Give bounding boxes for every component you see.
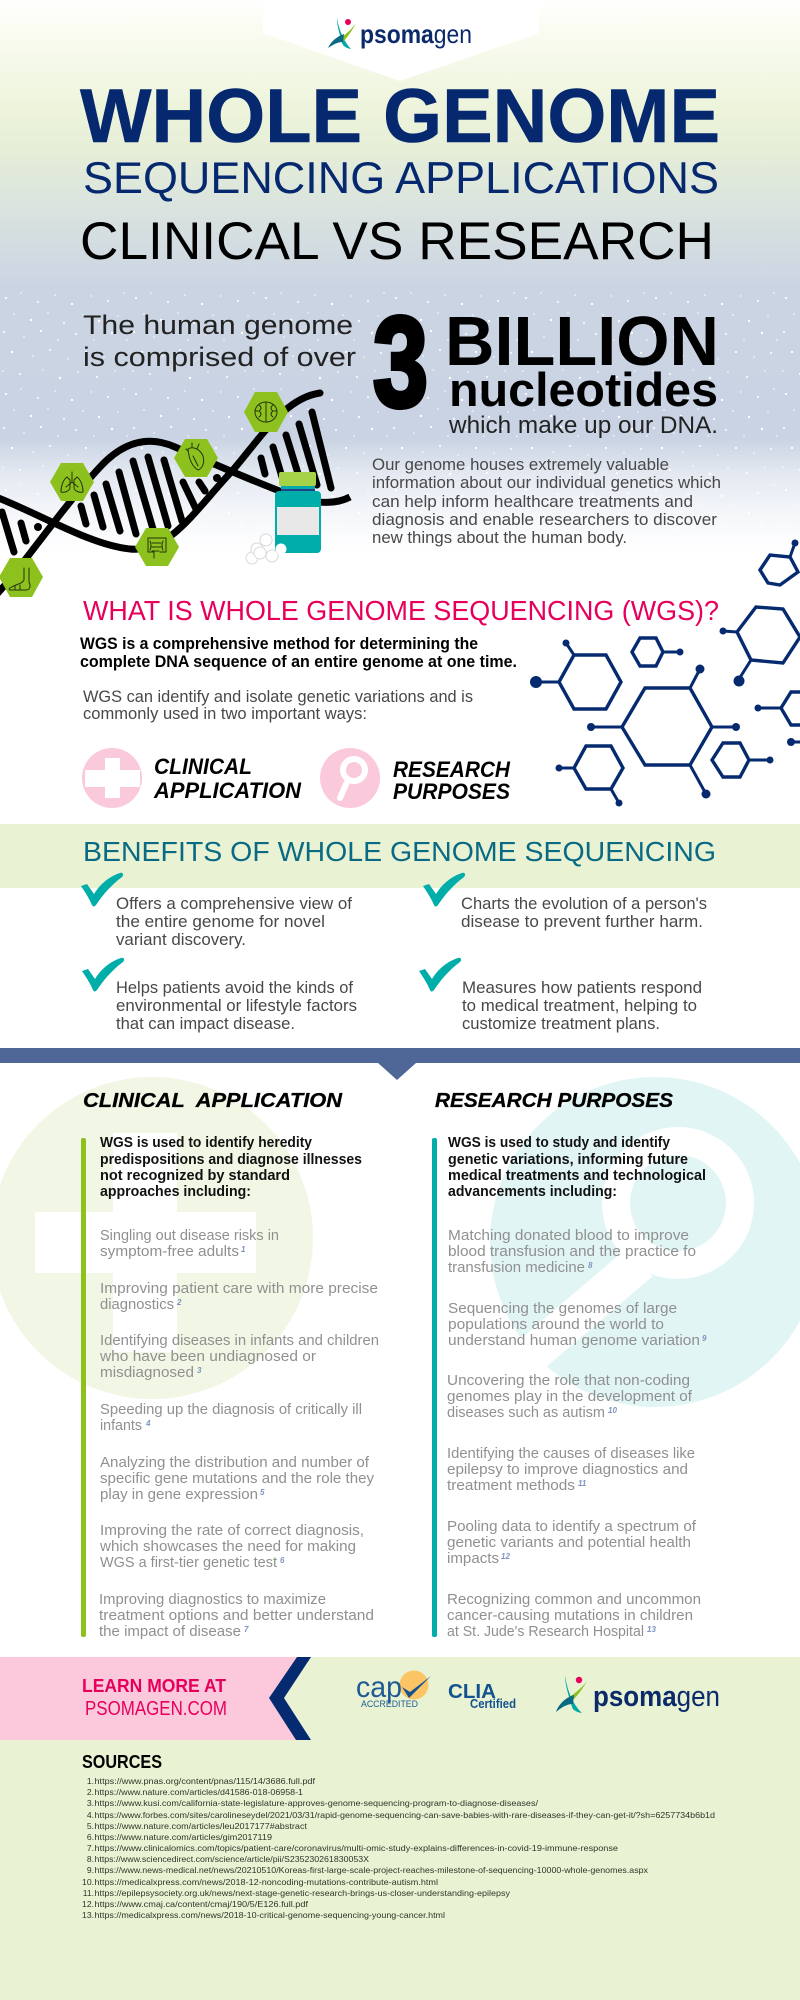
item 12: Pooling data to identify a spectrum of [447, 1519, 697, 1535]
benefit 4: to medical treatment, helping to [462, 996, 697, 1015]
divider band with arrow [0, 1048, 800, 1080]
icon: pink magnifier circle [320, 748, 380, 808]
watermark: plus circle [0, 1077, 313, 1399]
benefit 2 [423, 873, 707, 931]
intro [100, 1135, 362, 1200]
genome description paragraph [372, 455, 721, 547]
icon: pills [246, 534, 286, 564]
item 12 [447, 1519, 697, 1567]
source list: 10. [82, 1877, 94, 1887]
CAP accredited logo: cap [356, 1671, 402, 1704]
genome description paragraph: Our genome houses extremely valuable [372, 455, 669, 474]
WGS uses intro: commonly used in two important ways: [83, 704, 367, 723]
item 10: genomes play in the development of [447, 1389, 693, 1405]
statistic: 3 billion nucleotides [83, 291, 719, 439]
benefit 3: that can impact disease. [116, 1014, 295, 1033]
item 8 [448, 1228, 696, 1276]
item 1: Singling out disease risks in [100, 1228, 279, 1244]
item 6: WGS a first-tier genetic test [100, 1555, 277, 1571]
item 1: symptom-free adults [100, 1244, 239, 1260]
WGS definition: complete DNA sequence of an entire genome at one time. [80, 653, 517, 671]
footer background [0, 1657, 800, 2000]
intro: medical treatments and technological [448, 1168, 706, 1184]
intro: WGS is used to identify heredity [100, 1135, 312, 1151]
item 8: blood transfusion and the practice fo [448, 1244, 696, 1260]
star field [0, 290, 800, 540]
psomagen logo footer [556, 1675, 720, 1713]
source list: https://www.pnas.org/content/pnas/115/14/3686.full.pdf [94, 1776, 316, 1786]
label: APPLICATION [153, 778, 302, 803]
item 7: 7 [244, 1625, 249, 1634]
item 11: Identifying the causes of diseases like [447, 1446, 695, 1462]
benefit 2: disease to prevent further harm. [461, 912, 703, 931]
molecule network illustration [530, 540, 800, 806]
watermark: magnifier circle [490, 1077, 800, 1407]
benefit 3: environmental or lifestyle factors [116, 996, 357, 1015]
source list: https://www.kusi.com/california-state-legislature-approves-genome-sequencing-program-to-diagnose-diseases/ [94, 1798, 539, 1808]
item 13: 13 [647, 1625, 656, 1634]
item 5: 5 [260, 1488, 265, 1497]
source list: https://medicalxpress.com/news/2018-10-critical-genome-sequencing-young-cancer.html [94, 1910, 445, 1920]
item 10: 10 [608, 1406, 617, 1415]
item 13 [447, 1592, 701, 1640]
item 5: Analyzing the distribution and number of [100, 1455, 370, 1471]
psomagen wordmark: psomagen [360, 19, 472, 49]
icon: lungs hexagon [50, 463, 94, 501]
title [80, 74, 720, 271]
item 6: which showcases the need for making [99, 1539, 356, 1555]
DNA strands [0, 393, 350, 595]
accent bar [81, 1138, 86, 1637]
benefit 3: Helps patients avoid the kinds of [116, 978, 353, 997]
benefit 1: Offers a comprehensive view of [116, 894, 352, 913]
source list: 3. [87, 1798, 94, 1808]
big number: 3 [373, 291, 428, 434]
icon: pink plus circle [82, 748, 142, 808]
navy chevron [269, 1657, 311, 1740]
benefit 2: Charts the evolution of a person's [461, 894, 707, 913]
benefit 4: customize treatment plans. [462, 1014, 660, 1033]
source list: https://epilepsysociety.org.uk/news/next-stage-genetic-research-brings-us-closer-understanding-epilepsy [94, 1888, 511, 1898]
item 9: understand human genome variation [448, 1333, 700, 1349]
source list: https://www.nature.com/articles/gim2017119 [94, 1832, 272, 1842]
item 12: impacts [447, 1551, 499, 1567]
source list: 8. [87, 1854, 94, 1864]
genome description paragraph: diagnosis and enable researchers to discover [372, 510, 717, 529]
source list: 13. [82, 1910, 94, 1920]
item 5: specific gene mutations and the role they [100, 1471, 375, 1487]
item 13: cancer-causing mutations in children [447, 1608, 693, 1624]
intro: not recognized by standard [100, 1168, 290, 1184]
item 4: Speeding up the diagnosis of critically ill [100, 1402, 362, 1418]
item 8: transfusion medicine [448, 1260, 585, 1276]
item 3: 3 [197, 1366, 202, 1375]
title line 3: CLINICAL VS RESEARCH [80, 212, 714, 271]
CLIA certified logo [448, 1681, 516, 1711]
benefit 1: variant discovery. [116, 930, 246, 949]
genome description paragraph: can help inform healthcare treatments and [372, 492, 693, 511]
website: PSOMAGEN.COM [85, 1698, 227, 1720]
intro: advancements including: [448, 1184, 617, 1200]
icon: heart hexagon [174, 439, 218, 477]
psomagen logo icon [328, 18, 356, 49]
source list: https://www.news-medical.net/news/20210510/Koreas-first-large-scale-project-reaches-milestone-of-sequencing-10000-whole-genomes.aspx [94, 1865, 649, 1875]
item 12: 12 [501, 1552, 510, 1561]
CLIA certified logo: CLIA [448, 1681, 496, 1703]
icon: medicine bottle [275, 472, 321, 553]
clinical application badge [82, 748, 302, 808]
intro: approaches including: [100, 1184, 251, 1200]
statistic: 3 billion nucleotides: is comprised of over [83, 342, 356, 372]
item 12: genetic variants and potential health [447, 1535, 691, 1551]
heading: sources: SOURCES [82, 1752, 162, 1772]
source list [82, 1776, 715, 1920]
item 9: 9 [702, 1334, 707, 1343]
panel: research purposes [432, 1090, 707, 1640]
benefit 1 [81, 873, 352, 949]
label: PURPOSES [393, 779, 510, 804]
label: CLINICAL [154, 754, 252, 779]
item 7: treatment options and better understand [99, 1608, 374, 1624]
which make up our DNA: which make up our DNA. [448, 412, 718, 439]
icon: intestine hexagon [135, 528, 179, 566]
intro: predispositions and diagnose illnesses [100, 1152, 362, 1168]
source list: 7. [87, 1843, 94, 1853]
item 2 [100, 1281, 378, 1313]
benefits band [0, 824, 800, 888]
icon: foot hexagon [0, 558, 43, 597]
item 3: Identifying diseases in infants and children [100, 1333, 379, 1349]
source list: 9. [87, 1865, 94, 1875]
source list: https://www.nature.com/articles/d41586-018-06958-1 [94, 1787, 303, 1797]
WGS definition: WGS is a comprehensive method for determining the [80, 635, 478, 653]
source list: 12. [82, 1899, 94, 1909]
item 8: Matching donated blood to improve [448, 1228, 689, 1244]
intro: WGS is used to study and identify [448, 1135, 670, 1151]
icon: brain hexagon [244, 392, 288, 432]
item 6 [99, 1523, 364, 1571]
nucleotides: nucleotides [449, 363, 718, 416]
logo badge [263, 0, 539, 81]
item 5: play in gene expression [100, 1487, 258, 1503]
intro: genetic variations, informing future [448, 1152, 688, 1168]
CLIA certified logo: Certified [470, 1697, 516, 1711]
item 2: diagnostics [100, 1297, 174, 1313]
benefit 1: the entire genome for novel [116, 912, 325, 931]
DNA rungs [2, 412, 331, 552]
WGS definition [80, 635, 517, 671]
item 11 [447, 1446, 695, 1494]
item 11: treatment methods [447, 1478, 575, 1494]
item 4 [100, 1402, 362, 1434]
item 7: the impact of disease [99, 1624, 241, 1640]
panel: clinical application [81, 1090, 379, 1640]
title line 1: WHOLE GENOME [80, 74, 720, 159]
source list: 2. [87, 1787, 94, 1797]
heading: RESEARCH PURPOSES [435, 1090, 674, 1112]
learn more text: LEARN MORE AT [82, 1676, 226, 1696]
item 5 [100, 1455, 375, 1503]
logo icon [556, 1675, 587, 1713]
item 2: 2 [176, 1298, 182, 1307]
benefit 3 [82, 958, 357, 1033]
item 4: infants [100, 1418, 142, 1434]
benefit 4: Measures how patients respond [462, 978, 702, 997]
genome description paragraph: new things about the human body. [372, 528, 627, 547]
item 11: epilepsy to improve diagnostics and [447, 1462, 688, 1478]
intro [448, 1135, 706, 1200]
item 9 [448, 1301, 707, 1349]
heading: CLINICAL APPLICATION [83, 1090, 343, 1112]
WGS uses intro: WGS can identify and isolate genetic variations and is [83, 687, 473, 706]
item 11: 11 [578, 1479, 587, 1488]
source list: 11. [83, 1888, 94, 1898]
item 9: populations around the world to [448, 1317, 664, 1333]
source list: 5. [87, 1821, 94, 1831]
call to action banner [0, 1657, 311, 1740]
source list: https://medicalxpress.com/news/2018-12-noncoding-mutations-contribute-autism.html [94, 1877, 438, 1887]
source list: https://www.cmaj.ca/content/cmaj/190/5/E126.full.pdf [94, 1899, 309, 1909]
source list: 1. [87, 1776, 94, 1786]
item 13: at St. Jude's Research Hospital [447, 1624, 644, 1640]
CAP accredited logo [356, 1670, 431, 1709]
source list: https://www.clinicalomics.com/topics/patient-care/coronavirus/multi-omic-study-explains-differences-in-covid-19-immune-response [94, 1843, 618, 1853]
label [393, 757, 511, 804]
label: RESEARCH [393, 757, 511, 782]
benefit 4 [419, 958, 702, 1033]
item 7: Improving diagnostics to maximize [99, 1592, 326, 1608]
source list: https://www.forbes.com/sites/carolineseydel/2021/03/31/rapid-genome-sequencing-can-save-babies-with-rare-diseases-if-they-can-get-it/?sh=6257734b6b1d [94, 1810, 715, 1820]
title line 2: SEQUENCING APPLICATIONS [83, 154, 719, 203]
lead-in text: The human genome [83, 310, 353, 340]
source list: https://www.nature.com/articles/leu2017177#abstract [94, 1821, 308, 1831]
CAP accredited logo: ACCREDITED [361, 1699, 418, 1709]
heading: what is WGS: WHAT IS WHOLE GENOME SEQUENCING (WGS)? [83, 595, 719, 626]
billion: BILLION [445, 302, 719, 380]
heading: benefits: BENEFITS OF WHOLE GENOME SEQUENCING [83, 836, 716, 867]
panel: benefits [0, 824, 800, 1033]
item 1 [100, 1228, 279, 1260]
background gradient [0, 0, 800, 600]
pink banner [0, 1657, 297, 1740]
item 2: Improving patient care with more precise [100, 1281, 378, 1297]
item 10 [447, 1373, 693, 1421]
item 10: Uncovering the role that non-coding [447, 1373, 690, 1389]
item 3 [99, 1333, 379, 1381]
item 1: 1 [241, 1245, 246, 1254]
source list: 6. [87, 1832, 94, 1842]
research purposes badge [320, 748, 511, 808]
source list: 4. [87, 1810, 94, 1820]
label [153, 754, 302, 803]
genome description paragraph: information about our individual genetics which [372, 473, 721, 492]
item 9: Sequencing the genomes of large [448, 1301, 677, 1317]
item 8: 8 [588, 1261, 593, 1270]
wordmark: psomagen [593, 1681, 720, 1713]
sources [82, 1752, 715, 1920]
DNA helix illustration [0, 392, 350, 597]
item 3: misdiagnosed [100, 1365, 194, 1381]
item 10: diseases such as autism [447, 1405, 605, 1421]
item 4: 4 [145, 1419, 151, 1428]
WGS uses intro [83, 687, 473, 723]
item 7 [99, 1592, 374, 1640]
item 3: who have been undiagnosed or [99, 1349, 316, 1365]
item 6: Improving the rate of correct diagnosis, [100, 1523, 364, 1539]
item 13: Recognizing common and uncommon [447, 1592, 701, 1608]
item 6: 6 [280, 1556, 285, 1565]
source list: https://www.sciencedirect.com/science/article/pii/S235230261830053X [94, 1854, 369, 1864]
accent bar [432, 1138, 437, 1637]
